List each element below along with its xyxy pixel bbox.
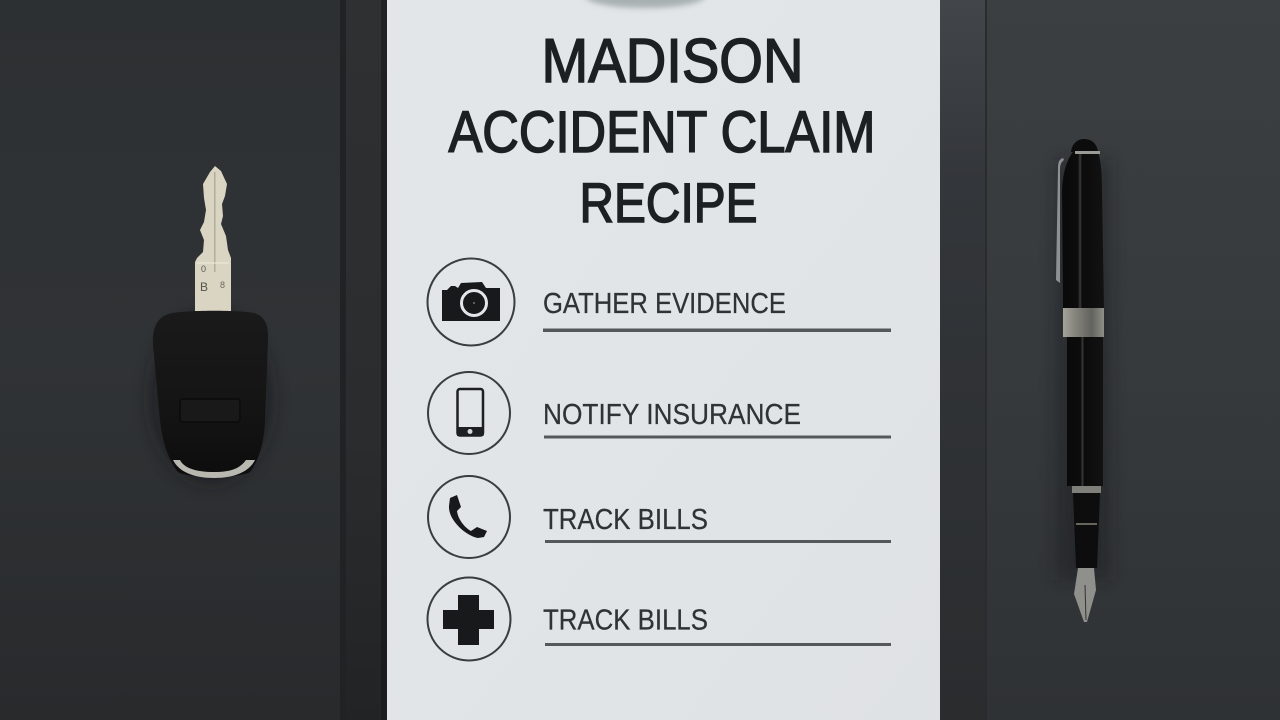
- icon: smartphone: [428, 372, 510, 454]
- checklist item: track bills: TRACK BILLS: [543, 504, 708, 536]
- pen clip: [1056, 158, 1064, 283]
- checklist item: track bills: [428, 476, 891, 558]
- pen barrel: [1067, 337, 1103, 486]
- checklist item: gather evidence: GATHER EVIDENCE: [543, 288, 786, 320]
- title: [448, 27, 876, 234]
- icon: car key: 8: [220, 280, 225, 290]
- title: MADISON: [542, 27, 804, 96]
- icon: camera: [428, 258, 514, 346]
- pen cap: [1062, 152, 1104, 308]
- checklist item: notify insurance: [428, 372, 891, 454]
- checklist item: track bills second: [428, 578, 891, 660]
- title: RECIPE: [580, 171, 758, 234]
- icon: car key: [149, 166, 273, 484]
- lower ring: [1072, 486, 1101, 493]
- title: ACCIDENT CLAIM: [448, 100, 876, 165]
- checklist item: track bills second: TRACK BILLS: [543, 604, 708, 636]
- pen grip: [1073, 493, 1100, 568]
- icon: car key: 0: [201, 264, 206, 274]
- panel: paper sheet: [381, 0, 940, 720]
- icon: fountain pen: [1056, 139, 1110, 622]
- icon: medical cross: [428, 578, 510, 660]
- icon: telephone: [428, 476, 510, 558]
- key fob metal loop: [173, 460, 255, 478]
- checklist item: notify insurance: NOTIFY INSURANCE: [543, 399, 801, 431]
- icon: car key: B: [200, 280, 208, 294]
- cap finial: [1071, 139, 1098, 152]
- centre band: [1063, 308, 1104, 337]
- checklist item: gather evidence: [428, 258, 891, 346]
- pen nib: [1074, 568, 1096, 622]
